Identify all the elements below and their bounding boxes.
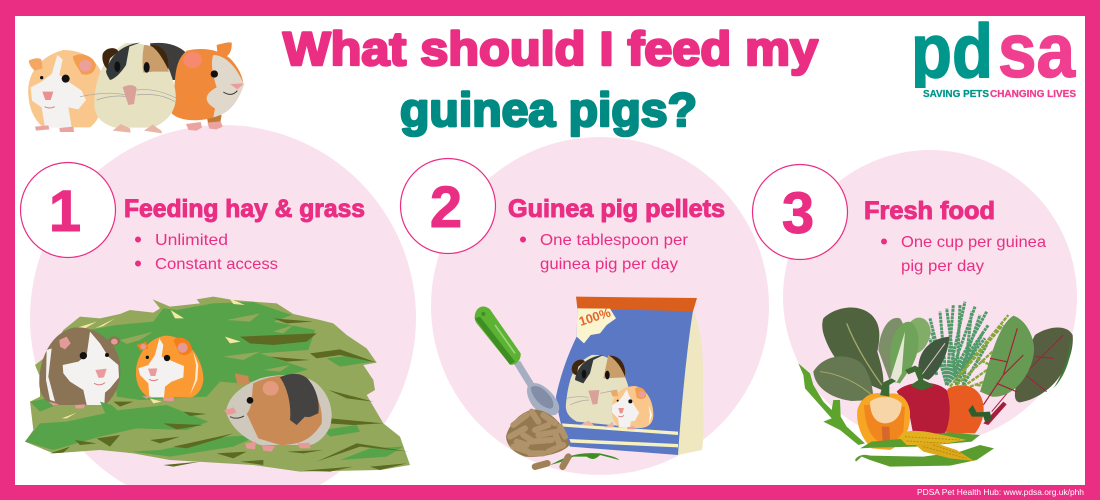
leaves under pellets (550, 453, 619, 465)
bag top band (576, 297, 697, 311)
illustration: three guinea pigs (28, 42, 244, 133)
step 1: bullet list (135, 232, 278, 273)
hay base (25, 297, 410, 472)
illustration: vegetables (798, 302, 1073, 467)
step 2: heading: Guinea pig pellets (508, 195, 725, 223)
chard leaves (1015, 327, 1073, 402)
rocket leaf (798, 363, 865, 445)
step 3: number badge (752, 164, 848, 260)
title: guinea pigs? (400, 83, 697, 136)
dark leafy greens (822, 308, 883, 390)
green hay patches (25, 302, 403, 460)
peach guinea pig (28, 50, 104, 132)
orange guinea pig (150, 42, 244, 131)
logo: PDSA: SAVING PETS (923, 88, 989, 100)
dark hay streaks (50, 318, 408, 472)
footer credit: PDSA Pet Health Hub: www.pdsa.org.uk/phh (917, 487, 1084, 497)
step 3: number badge: 3 (782, 181, 814, 246)
dill fronds (930, 302, 988, 385)
yellow hay slivers (62, 298, 245, 418)
step 3: bullet list: pig per day (901, 258, 984, 275)
logo: PDSA: sa (998, 9, 1076, 94)
step 2: bullet list: guinea pig per day (540, 256, 678, 273)
step 1: number badge (20, 162, 116, 258)
step 3: heading: Fresh food (864, 197, 995, 225)
orange guinea pig in hay (136, 336, 203, 401)
step 2: bullet list (520, 232, 689, 273)
tricolour guinea pig (224, 373, 332, 452)
cream guinea pig (80, 43, 177, 133)
pellet pile (506, 409, 569, 457)
step 2: number badge (400, 158, 496, 254)
hay tuft in front of pigs (100, 402, 120, 415)
spoon (475, 306, 559, 415)
step 2: number badge: 2 (430, 175, 462, 240)
illustration: pellet bag, spoon and pellets (475, 297, 703, 467)
title (283, 22, 818, 136)
bag guinea pig, cream (566, 355, 628, 427)
pak choi (878, 318, 904, 382)
carrot-top fronds (950, 315, 1008, 387)
panel: step 3 background circle (783, 150, 1077, 444)
green beans (860, 432, 980, 448)
panel: step 2 background circle (431, 137, 769, 475)
logo: PDSA (914, 21, 1076, 98)
brown guinea pig (39, 327, 120, 408)
title: What should I feed my (283, 22, 818, 75)
step 3: bullet list (881, 234, 1046, 275)
logo: PDSA: CHANGING LIVES (990, 88, 1076, 100)
step 2: bullet list: One tablespoon per (540, 232, 689, 249)
step 1: bullet list: Constant access (155, 256, 278, 273)
bag front (556, 308, 693, 455)
bag stripes (562, 423, 678, 447)
step 1: number badge: 1 (49, 179, 81, 244)
bag guinea pig, peach (611, 386, 653, 429)
illustration: hay pile with guinea pigs (25, 297, 410, 472)
loose pellets (535, 457, 568, 467)
logo: PDSA: pd (911, 9, 993, 94)
100% label: 100% (577, 306, 612, 329)
step 1: bullet list: Unlimited (155, 232, 228, 249)
corn (900, 431, 967, 445)
red pepper (897, 366, 950, 435)
step 1: heading: Feeding hay & grass (124, 195, 365, 223)
panel: step 1 background circle (30, 125, 416, 500)
100% label (577, 306, 616, 343)
yellow pepper half (857, 378, 910, 450)
orange pepper (937, 385, 992, 433)
bag gusset (677, 310, 703, 455)
step 3: bullet list: One cup per guinea (901, 234, 1046, 251)
olive hay slivers (120, 313, 293, 372)
